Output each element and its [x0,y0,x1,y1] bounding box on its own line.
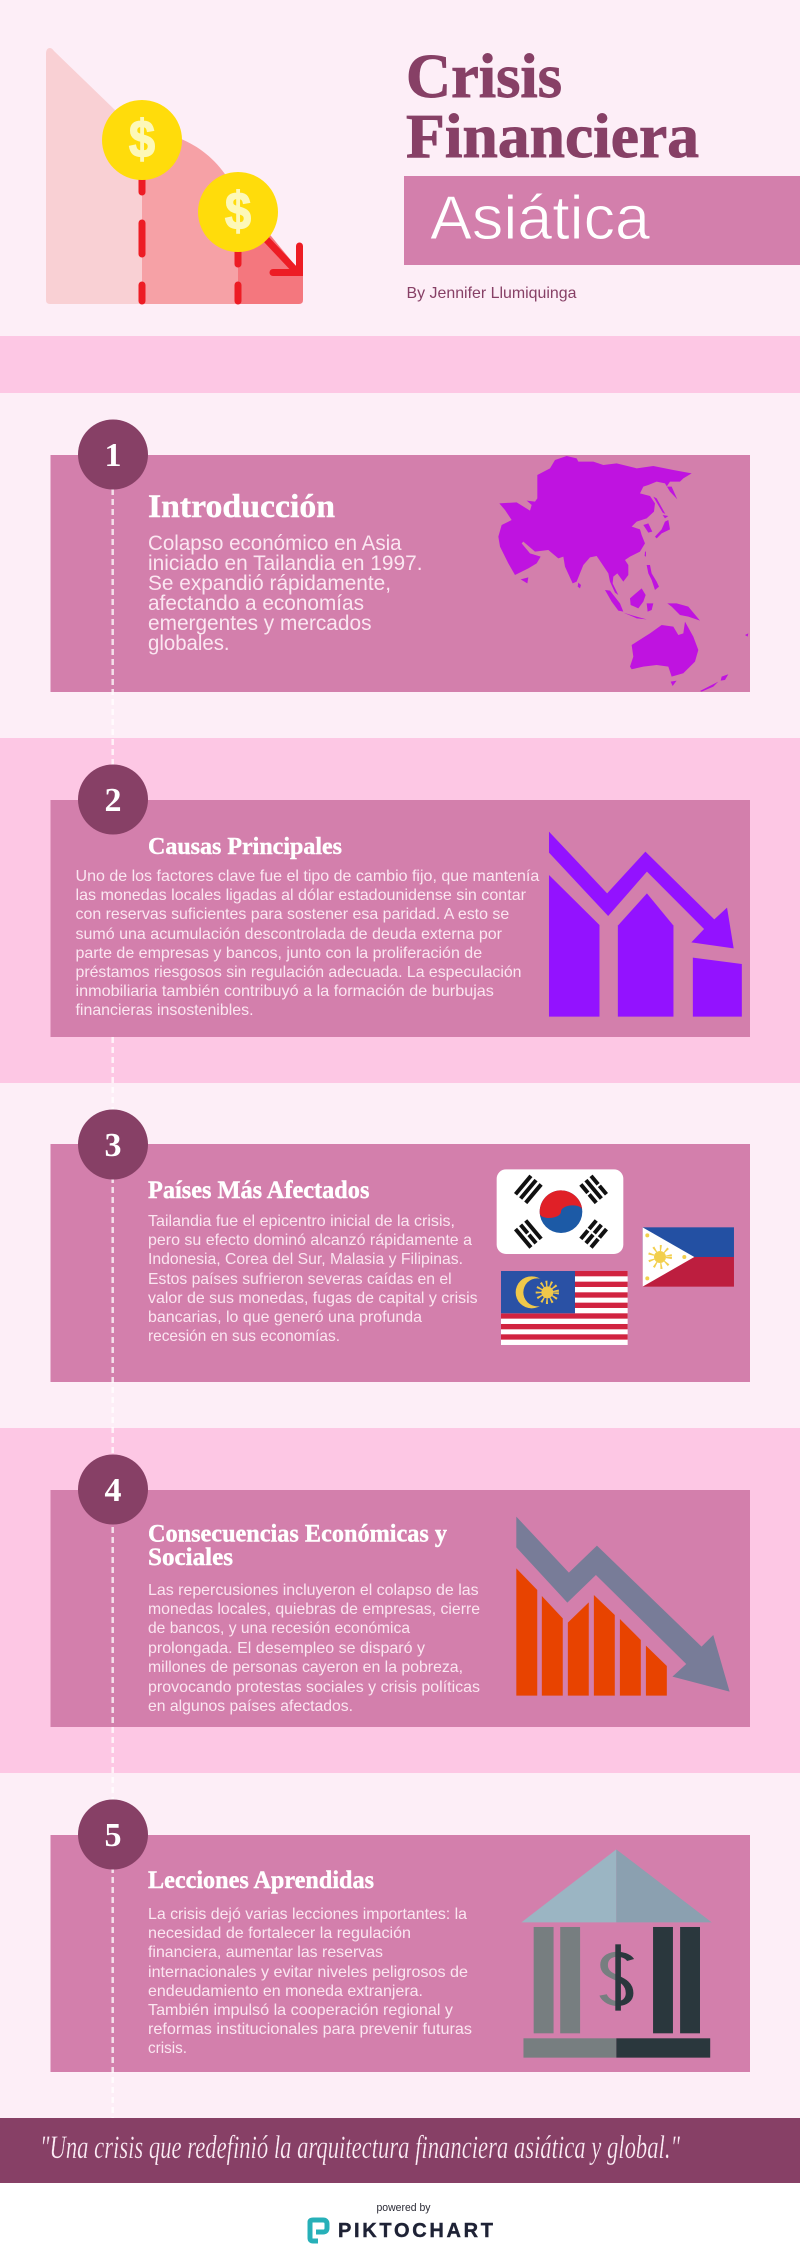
subtitle banner [404,176,800,265]
body text: También impulsó la cooperación regional y [148,2002,453,2019]
icon: map of Asia and Oceania [498,456,748,692]
powered by label: powered by [376,2202,431,2214]
body text: pero su efecto dominó alcanzó rápidamente a [148,1232,472,1249]
icon: falling purple bar chart [549,832,742,1017]
heading: Introducción [148,489,335,525]
body text: con reservas suficientes para sostener esa paridad. A esto se [76,906,509,923]
heading: Países Más Afectados [148,1177,370,1204]
body text: financieras insostenibles. [76,1002,254,1019]
icon: bank building with dollar sign [521,1849,712,2058]
byline: By Jennifer Llumiquinga [406,285,577,302]
step badge 4 [78,1454,148,1524]
body text: Las repercusiones incluyeron el colapso de las [148,1582,479,1599]
step badge 1 [78,420,148,490]
body text: prolongada. El desempleo se disparó y [148,1640,425,1657]
logo mark [310,2220,327,2241]
quote banner [0,2118,800,2183]
step badge 5: 5 [104,1817,122,1854]
wordmark: PIKTOCHART [338,2220,493,2242]
panel: causas principales [50,800,750,1037]
footer background [0,2183,800,2263]
body text: millones de personas cayeron en la pobreza, [148,1659,463,1676]
body text: La crisis dejó varias lecciones importantes: la [148,1906,467,1923]
heading: Sociales [148,1544,233,1571]
body text: reformas institucionales para prevenir futuras [148,2021,472,2038]
body text: sumó una acumulación descontrolada de deuda externa por [76,926,503,943]
body text: recesión en sus economías. [148,1328,340,1345]
icon: flag of Malaysia [501,1271,628,1345]
heading [148,1520,447,1571]
icon: flag of South Korea [497,1169,623,1254]
body text: Colapso económico en Asia [148,532,402,555]
heading: Causas Principales [148,834,342,860]
panel: lecciones aprendidas [50,1835,750,2072]
body text: necesidad de fortalecer la regulación [148,1925,411,1942]
panel: introducción [50,455,750,692]
decorative header band [0,336,800,393]
body text: Se expandió rápidamente, [148,572,391,595]
section 2 background [0,738,800,1083]
coin 2: $ [225,182,251,241]
body text: iniciado en Tailandia en 1997. [148,552,422,575]
step badge 5 [78,1800,148,1870]
body text [148,1213,478,1345]
icon: flag of the Philippines [643,1227,734,1287]
step badge 4: 4 [104,1472,122,1509]
panel: consecuencias económicas y sociales [50,1490,750,1727]
body text [148,532,422,655]
icon: orange bars with grey falling arrow [516,1517,730,1696]
body text [148,1582,480,1715]
body text: de bancos, y una recesión económica [148,1620,410,1637]
body text: Estos países sufrieron severas caídas en el [148,1271,452,1288]
title: Crisis [406,43,562,111]
timeline dashed connector, upper part [111,489,114,800]
step badge 1: 1 [104,437,122,474]
body text: internacionales y evitar niveles peligrosos de [148,1964,468,1981]
heading: Consecuencias Económicas y [148,1520,447,1548]
body text: inmobiliaria también contribuyó a la formación de burbujas [76,983,494,1000]
coin 2 [198,172,278,252]
body text: préstamos riesgosos sin regulación adecuada. La especulación [76,964,522,981]
piktochart logo [310,2220,493,2242]
section 4 background [0,1428,800,1773]
red dashed drop lines [142,178,300,301]
body text [148,1906,472,2057]
header illustration: falling money chart [46,48,303,304]
body text: Uno de los factores clave fue el tipo de cambio fijo, que mantenía [76,868,539,885]
body text: valor de sus monedas, fugas de capital y crisis [148,1290,478,1307]
body text: las monedas locales ligadas al dólar estadounidense sin contar [76,887,527,904]
heading: Lecciones Aprendidas [148,1867,374,1894]
step badge 2: 2 [104,782,122,819]
body text: emergentes y mercados [148,612,372,635]
title [406,43,699,171]
timeline dashed connector, lower part [111,1037,114,2118]
step badge 3: 3 [104,1127,122,1164]
body text: monedas locales, quiebras de empresas, cierre [148,1601,480,1618]
panel: países más afectados [50,1144,750,1382]
body text: Tailandia fue el epicentro inicial de la crisis, [148,1213,455,1230]
body text: endeudamiento en moneda extranjera. [148,1983,423,2000]
title: Financiera [406,103,699,171]
step badge 3 [78,1110,148,1180]
body text: afectando a economías [148,592,364,615]
body text: parte de empresas y bancos, junto con la proliferación de [76,945,482,962]
body text: financiera, aumentar las reservas [148,1944,383,1961]
body text [76,868,539,1019]
coin 1: $ [129,110,155,169]
body text: crisis. [148,2040,187,2057]
body text: globales. [148,632,230,655]
step badge 2 [78,764,148,834]
body text: en algunos países afectados. [148,1698,353,1715]
body text: Indonesia, Corea del Sur, Malasia y Filipinas. [148,1251,463,1268]
body text: bancarias, lo que generó una profunda [148,1309,422,1326]
body text: provocando protestas sociales y crisis políticas [148,1679,480,1696]
subtitle banner: Asiática [430,184,651,253]
coin 1 [102,100,182,180]
